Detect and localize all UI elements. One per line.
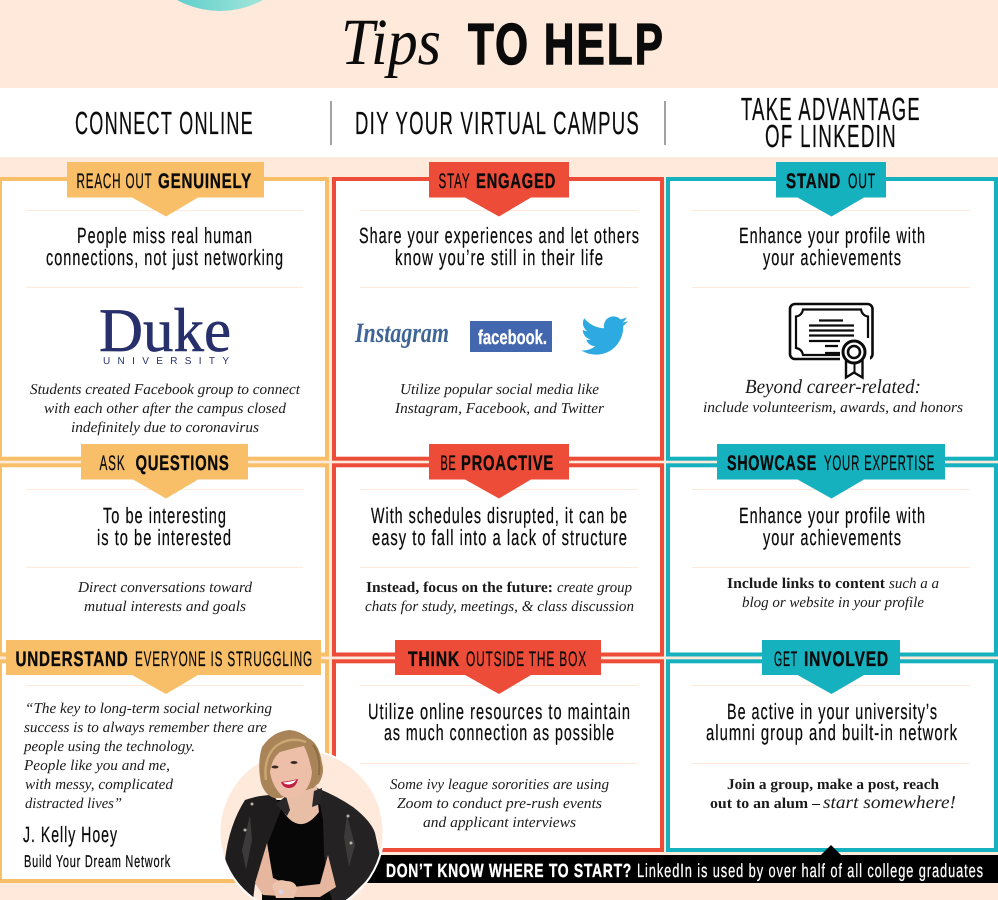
panel: stand out: STAND: [786, 170, 841, 193]
panel: showcase your expertise: Include links to content: [727, 576, 885, 592]
panel: understand everyone is struggling: UNDERSTAND: [16, 648, 128, 671]
panel: understand everyone is struggling: [0, 640, 327, 881]
column headings band: OF LINKEDIN: [765, 118, 897, 154]
quote: People like you and me,: [23, 758, 170, 774]
panel: ask questions: Direct conversations toward: [77, 580, 253, 596]
panel: stand out: Beyond career-related:: [745, 376, 921, 398]
panel: stay engaged: Share your experiences and let others: [359, 223, 640, 248]
panel: be proactive: BE: [440, 452, 456, 475]
panel: stand out: include volunteerism, awards, and honors: [703, 400, 963, 416]
panel: understand everyone is struggling: Build Your Dream Network: [24, 852, 171, 871]
panel: stay engaged: Instagram, Facebook, and Twitter: [394, 401, 604, 417]
panel: think outside the box: as much connection as possible: [384, 720, 615, 745]
panel: showcase your expertise: your achievements: [763, 525, 902, 550]
panel: ask questions: [0, 444, 327, 654]
panel: be proactive: easy to fall into a lack of structure: [372, 525, 628, 550]
callout bar: [360, 845, 998, 883]
panel: stay engaged: ENGAGED: [476, 170, 556, 193]
panel: reach out genuinely: Students created Facebook group to connect: [30, 382, 301, 398]
panel: be proactive: [334, 444, 662, 654]
panel: reach out genuinely: connections, not just networking: [46, 245, 284, 270]
panel: get involved: out to an alum –: [710, 796, 821, 812]
panel: think outside the box: [334, 640, 662, 850]
panel: stand out: your achievements: [763, 245, 902, 270]
panel: get involved: Join a group, make a post, reach: [727, 777, 940, 793]
panel: think outside the box: OUTSIDE THE BOX: [466, 648, 587, 671]
panel: be proactive: PROACTIVE: [461, 452, 554, 475]
portrait: J. Kelly Hoey: [218, 730, 384, 900]
panel: stand out: OUT: [848, 170, 876, 193]
panel: showcase your expertise: such a a: [889, 576, 939, 592]
panel: be proactive: create group: [557, 580, 632, 596]
panel: think outside the box: Utilize online resources to maintain: [368, 699, 631, 724]
panel: understand everyone is struggling: J. Kelly Hoey: [23, 822, 118, 847]
panel: stay engaged: know you’re still in their life: [395, 245, 604, 270]
panel: reach out genuinely: GENUINELY: [158, 170, 252, 193]
logo: Duke University: Duke: [99, 297, 231, 365]
panel: reach out genuinely: with each other after the campus closed: [44, 401, 287, 417]
panel: think outside the box: Zoom to conduct pre-rush events: [397, 796, 602, 812]
title: [341, 6, 665, 79]
panel: get involved: start somewhere!: [823, 792, 956, 812]
panel: get involved: INVOLVED: [804, 648, 889, 671]
panel: be proactive: With schedules disrupted, it can be: [371, 503, 628, 528]
panel: showcase your expertise: blog or website in your profile: [742, 595, 924, 611]
quote: people using the technology.: [23, 739, 195, 755]
panel: reach out genuinely: [0, 162, 327, 459]
quote: [23, 701, 273, 812]
column headings band: DIY YOUR VIRTUAL CAMPUS: [355, 105, 640, 141]
panel: ask questions: QUESTIONS: [136, 452, 230, 475]
panel: ask questions: ASK: [100, 452, 126, 475]
quote: success is to always remember there are: [24, 720, 267, 736]
logo: Facebook: [470, 321, 552, 352]
title: Tips: [341, 6, 441, 79]
panel: stay engaged: STAY: [438, 170, 470, 193]
column headings band: [0, 88, 998, 157]
panel: reach out genuinely: People miss real human: [77, 223, 253, 248]
panel: stay engaged: Utilize popular social media like: [400, 382, 599, 398]
panel: stay engaged: [334, 162, 662, 459]
panel: be proactive: chats for study, meetings, & class discussion: [365, 599, 634, 615]
panel: reach out genuinely: indefinitely due to coronavirus: [71, 420, 259, 436]
panel: think outside the box: Some ivy league sororities are using: [390, 777, 609, 793]
panel: reach out genuinely: REACH OUT: [76, 170, 152, 193]
column headings band: CONNECT ONLINE: [75, 105, 254, 141]
panel: think outside the box: THINK: [408, 648, 460, 671]
panel: ask questions: mutual interests and goals: [84, 599, 246, 615]
icon: certificate: [790, 304, 872, 378]
panel: ask questions: To be interesting: [103, 503, 227, 528]
quote: “The key to long-term social networking: [25, 701, 273, 717]
panel: think outside the box: and applicant interviews: [423, 815, 576, 831]
panel: showcase your expertise: SHOWCASE: [727, 452, 817, 475]
panel: get involved: GET: [774, 648, 798, 671]
icon: Twitter bird: [581, 316, 628, 355]
panel: ask questions: is to be interested: [97, 525, 232, 550]
logo: Facebook: facebook.: [478, 327, 547, 349]
panel: get involved: [668, 640, 996, 850]
panel: stand out: [668, 162, 996, 459]
panel: be proactive: Instead, focus on the future:: [366, 580, 553, 596]
quote: distracted lives”: [25, 796, 122, 812]
panel: understand everyone is struggling: EVERYONE IS STRUGGLING: [135, 648, 313, 671]
logo: Duke University: UNIVERSITY: [103, 356, 229, 367]
quote: with messy, complicated: [25, 777, 173, 793]
title: TO HELP: [468, 12, 665, 77]
decorative teal circle: [130, 0, 310, 11]
panel: showcase your expertise: [668, 444, 996, 654]
logo: Instagram: Instagram: [354, 318, 449, 349]
callout bar: DON’T KNOW WHERE TO START?: [386, 861, 632, 882]
